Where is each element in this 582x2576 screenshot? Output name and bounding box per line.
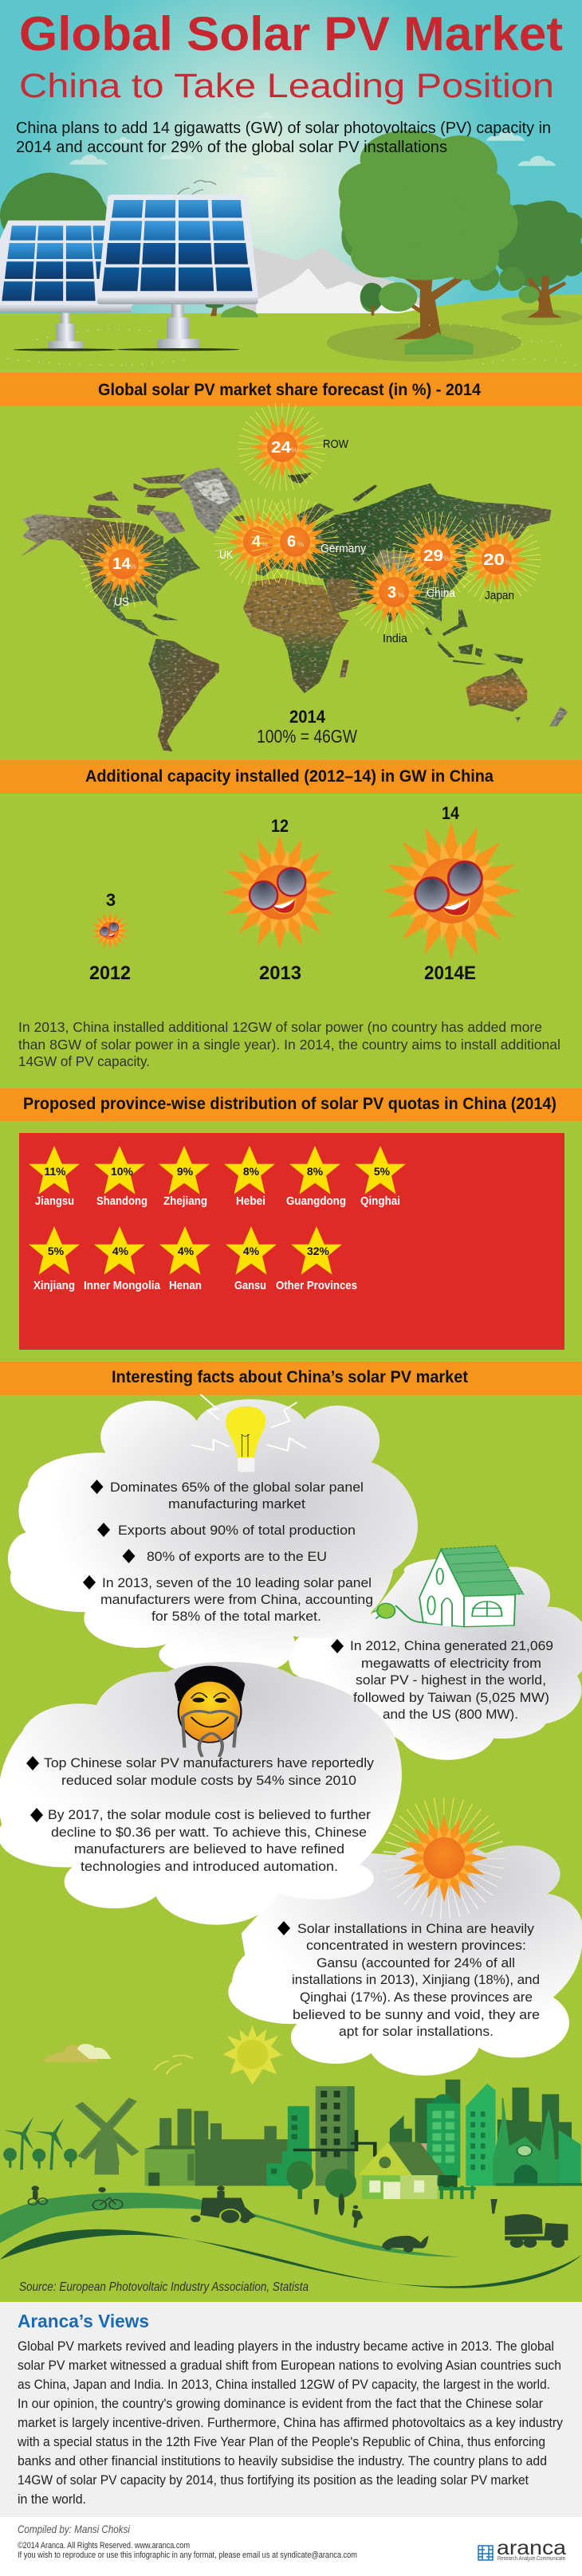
sun: India 3%: 3: [387, 584, 396, 602]
province percentages: 10%: [111, 1165, 134, 1178]
source note: Source: European Photovoltaic Industry Association, Statista: [19, 2280, 309, 2294]
subtitle: China to Take Leading Position: [19, 67, 554, 105]
province percentages: 4%: [112, 1245, 129, 1257]
solar panel: back: [0, 221, 134, 351]
sun: China 29%: %: [443, 555, 450, 563]
views text: banks and other financial institutions to heavily subsidise the industry. The country plans to add: [18, 2454, 547, 2468]
sun: India 3%: [360, 559, 427, 625]
footer credits: Compiled by: Mansi Choksi: [18, 2523, 131, 2535]
sun: UK 4%: [225, 508, 292, 575]
sun: 2014E: 14: [442, 803, 460, 823]
text: manufacturing facts: In 2013, seven of the 10 leading solar panel: [102, 1575, 372, 1590]
panel: Aranca's views: [0, 2302, 582, 2517]
province percentages: 8%: [307, 1165, 324, 1178]
text: manufacturing facts: manufacturing market: [168, 1496, 305, 1511]
panel: province quotas flag: [19, 1133, 564, 1350]
footer credits: [18, 2523, 357, 2560]
windmills: [3, 2100, 136, 2174]
capacity text: In 2013, China installed additional 12GW of solar power (no country has added more: [18, 1019, 542, 1035]
province names: Other Provinces: [276, 1279, 357, 1292]
map labels: China: [427, 586, 456, 600]
logo: aranca: aranca: [497, 2537, 566, 2559]
icon: smiling face: [175, 1666, 245, 1757]
sun: China 29%: 29: [423, 547, 443, 565]
cloud: manufacturing: [8, 1394, 418, 1676]
province names: [33, 1194, 400, 1292]
text: electricity generation: [331, 1638, 553, 1722]
map labels: US: [114, 595, 129, 609]
logo: aranca: Research.Analyze.Communicate: [497, 2556, 565, 2562]
sun: 2012: [89, 890, 131, 984]
province names: Zhejiang: [163, 1194, 207, 1208]
intro text: China plans to add 14 gigawatts (GW) of solar photovoltaics (PV) capacity in: [16, 120, 551, 137]
text: electricity generation: In 2012, China generated 21,069: [350, 1638, 553, 1653]
sun: 2012: 2012: [89, 963, 131, 984]
province percentages: 32%: [307, 1245, 330, 1257]
icon: house with plug: [373, 1546, 523, 1627]
sun: 2014E: 2014E: [424, 963, 476, 984]
sun: ROW 24%: [249, 414, 349, 480]
text: electricity generation: megawatts of electricity from: [361, 1656, 541, 1671]
province names: Qinghai: [360, 1194, 400, 1208]
views text: as China, Japan and India. In 2013, China installed 12GW of PV capacity, the largest in the world.: [18, 2378, 550, 2392]
text: electricity generation: followed by Taiwan (5,025 MW): [353, 1690, 549, 1705]
people top: [32, 2186, 225, 2199]
text: installations: [277, 1921, 540, 2039]
sun: Germany 6%: %: [297, 540, 304, 548]
text: manufacturing facts: manufacturers were from China, accounting: [100, 1592, 373, 1607]
province stars: [29, 1146, 406, 1275]
map caption: 100% = 46GW: [257, 726, 357, 747]
cloud: solar electricity: [289, 1546, 582, 1760]
map labels: Germany: [320, 542, 366, 555]
views text: [17, 2339, 564, 2507]
province names: Henan: [169, 1279, 202, 1292]
section header: interesting facts: Interesting facts about China’s solar PV market: [112, 1368, 468, 1386]
intro text: [16, 120, 551, 156]
province percentages: 5%: [374, 1165, 391, 1178]
chart: world map: [21, 414, 568, 751]
sun: 2012: 3: [106, 890, 116, 910]
map labels: India: [383, 632, 408, 645]
views text: Global PV markets revived and leading players in the industry became active in 2013. The global: [18, 2339, 554, 2354]
text: manufacturing facts: Dominates 65% of the global solar panel: [110, 1480, 364, 1495]
province names: Jiangsu: [35, 1194, 74, 1208]
province names: Shandong: [96, 1194, 147, 1208]
province percentages: [44, 1165, 391, 1257]
sun: US 14%: %: [130, 563, 136, 570]
text: cost facts: Top Chinese solar PV manufacturers have reportedly: [44, 1755, 375, 1770]
footer credits: ©2014 Aranca. All Rights Reserved. www.aranca.com: [18, 2541, 190, 2551]
capacity text: than 8GW of solar power in a single year). In 2014, the country aims to install additional: [18, 1037, 560, 1053]
intro text: 2014 and account for 29% of the global solar PV installations: [16, 139, 447, 156]
map labels: Japan: [485, 589, 514, 602]
province names: Inner Mongolia: [84, 1279, 161, 1292]
text: installations: apt for solar installations.: [339, 2024, 494, 2039]
capacity text: 14GW of PV capacity.: [18, 1053, 150, 1069]
cloud: costs: [0, 1662, 402, 1925]
text: cost facts: reduced solar module costs by 54% since 2010: [61, 1773, 356, 1788]
views text: market is largely incentive-driven. Furthermore, China has affirmed photovoltaics as a key industry: [18, 2416, 564, 2430]
cloud: installations: [228, 1812, 582, 2076]
green city illustration: [0, 2025, 582, 2288]
map caption: 2014: [289, 707, 326, 727]
solar panel: front: [97, 194, 258, 351]
map caption: [257, 707, 357, 747]
text: electricity generation: solar PV - highest in the world,: [356, 1672, 546, 1688]
text: installations: Gansu (accounted for 24% of all: [317, 1955, 515, 1970]
province percentages: 11%: [44, 1165, 66, 1178]
text: installations: Solar installations in China are heavily: [297, 1921, 535, 1936]
section header: province quotas: [0, 1088, 582, 1121]
text: cost facts: [26, 1755, 375, 1874]
sun: 2014E: [382, 803, 521, 984]
section header: province quotas: Proposed province-wise distribution of solar PV quotas in China (2014): [23, 1095, 556, 1113]
sun: Germany 6%: [262, 508, 328, 575]
province names: Xinjiang: [33, 1279, 75, 1292]
sun: 2013: 12: [271, 816, 289, 836]
province names: Hebei: [236, 1194, 265, 1208]
province percentages: 4%: [178, 1245, 195, 1257]
text: installations: installations in 2013), Xinjiang (18%), and: [292, 1972, 540, 1987]
text: cost facts: technologies and introduced automation.: [81, 1859, 338, 1874]
capacity text: [18, 1019, 560, 1069]
views text: 14GW of solar PV capacity by 2014, thus fortifying its position as the leading solar PV market: [18, 2473, 529, 2488]
province percentages: 8%: [243, 1165, 260, 1178]
province percentages: 4%: [243, 1245, 260, 1257]
sun: 2013: 2013: [259, 963, 301, 984]
section header: interesting facts: [0, 1362, 582, 1395]
province percentages: 5%: [48, 1245, 65, 1257]
text: manufacturing facts: for 58% of the total market.: [151, 1609, 321, 1624]
province names: Guangdong: [286, 1194, 346, 1208]
text: installations: believed to be sunny and void, they are: [293, 2007, 540, 2022]
section header: market share: Global solar PV market share forecast (in %) - 2014: [98, 381, 481, 399]
text: installations: Qinghai (17%). As these provinces are: [300, 1990, 533, 2005]
footer credits: If you wish to reproduce or use this infographic in any format, please email us at syndicate@aranca.com: [18, 2551, 357, 2560]
sun: US 14%: 14: [112, 555, 132, 573]
map labels: UK: [219, 548, 233, 562]
chart: capacity suns: [89, 803, 521, 984]
views text: in the world.: [18, 2492, 86, 2507]
house: [358, 2142, 476, 2199]
sun: UK 4%: %: [262, 540, 268, 548]
title: Global Solar PV Market: [19, 7, 563, 61]
views text: In our opinion, the country's growing dominance is evident from the fact that the Chinese solar: [18, 2397, 543, 2411]
vehicles and people: [28, 2194, 568, 2253]
sun: US 14%: [90, 531, 157, 598]
text: cost facts: By 2017, the solar module cost is believed to further: [48, 1807, 371, 1822]
background: green page: [0, 373, 582, 2302]
sun: Japan 20%: [463, 526, 530, 593]
sun: ROW 24%: 24: [271, 439, 292, 457]
landscape waves: [0, 2193, 582, 2288]
text: manufacturing facts: Exports about 90% of total production: [118, 1523, 356, 1538]
heading: Aranca's views: Aranca’s Views: [18, 2311, 149, 2331]
section header: market share: [0, 373, 582, 406]
hero illustration: [0, 0, 582, 373]
skyline: [390, 2080, 572, 2186]
sun: Japan 20%: %: [505, 559, 511, 567]
sun: Germany 6%: 6: [287, 533, 296, 551]
sun: 2013: [222, 816, 338, 984]
province percentages: 9%: [177, 1165, 194, 1178]
province names: Gansu: [234, 1279, 266, 1292]
section header: additional capacity: Additional capacity installed (2012–14) in GW in China: [85, 767, 494, 786]
text: manufacturing facts: [83, 1480, 373, 1624]
sun: ROW 24%: ROW: [323, 437, 349, 451]
sun: UK 4%: 4: [252, 533, 262, 551]
text: manufacturing facts: 80% of exports are to the EU: [147, 1549, 327, 1564]
sun: Japan 20%: 20: [483, 551, 505, 569]
text: electricity generation: and the US (800 MW).: [383, 1707, 518, 1722]
views text: solar PV market witnessed a gradual shift from European nations to evolving Asian countries such: [18, 2358, 561, 2373]
text: installations: concentrated in western provinces:: [306, 1938, 526, 1953]
text: cost facts: decline to $0.36 per watt. To achieve this, Chinese: [51, 1825, 367, 1840]
icon: sun: [398, 1812, 490, 1904]
map labels: [114, 542, 514, 645]
icon: light bulb: [191, 1394, 306, 1472]
sun: China 29%: [402, 522, 469, 589]
logo: aranca: [478, 2537, 566, 2562]
views text: with a special status in the 12th Five Year Plan of the People's Republic of China, thus enforcing: [17, 2435, 545, 2449]
text: cost facts: manufacturers are believed to have refined: [74, 1841, 344, 1857]
icon: birds: [178, 180, 216, 199]
sun: India 3%: %: [398, 591, 404, 599]
section header: additional capacity: [0, 760, 582, 794]
sun: ROW 24%: %: [291, 446, 297, 454]
